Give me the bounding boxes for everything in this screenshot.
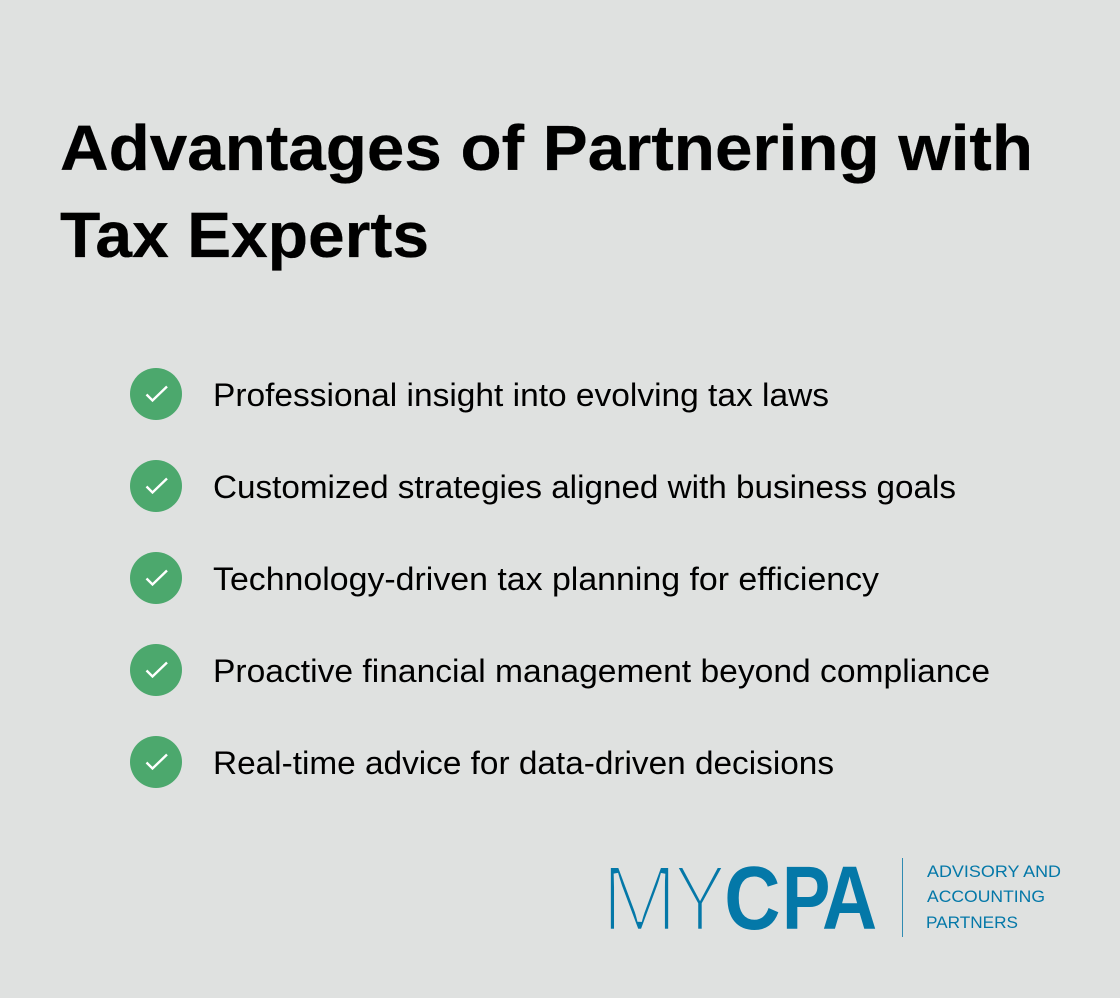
logo tagline: ACCOUNTING	[927, 887, 1045, 906]
advantages list	[130, 368, 990, 788]
logo tagline	[926, 862, 1061, 932]
logo tagline: PARTNERS	[926, 913, 1018, 932]
icon: check	[130, 368, 182, 420]
item text: Technology-driven tax planning for efficiency	[213, 561, 879, 597]
logo wordmark: M	[601, 846, 678, 952]
logo tagline: ADVISORY AND	[927, 862, 1061, 881]
item text: Proactive financial management beyond compliance	[213, 653, 990, 689]
logo: MYCPA	[601, 846, 1061, 952]
icon: check	[130, 460, 182, 512]
item 4	[130, 644, 990, 696]
icon: check	[130, 736, 182, 788]
item 2	[130, 460, 956, 512]
item 5	[130, 736, 834, 788]
title: Tax Experts	[60, 199, 429, 271]
item 3	[130, 552, 879, 604]
logo wordmark: Y	[674, 846, 726, 952]
item text: Professional insight into evolving tax laws	[213, 377, 829, 413]
item text: Customized strategies aligned with business goals	[213, 469, 956, 505]
logo wordmark: A	[822, 849, 877, 949]
logo wordmark: C	[724, 849, 780, 949]
item text: Real-time advice for data-driven decisions	[213, 745, 834, 781]
logo divider	[902, 858, 903, 937]
item 1	[130, 368, 829, 420]
logo wordmark	[601, 846, 877, 952]
title	[60, 112, 1033, 271]
title: Advantages of Partnering with	[60, 112, 1033, 184]
logo wordmark: P	[782, 849, 830, 949]
icon: check	[130, 644, 182, 696]
icon: check	[130, 552, 182, 604]
